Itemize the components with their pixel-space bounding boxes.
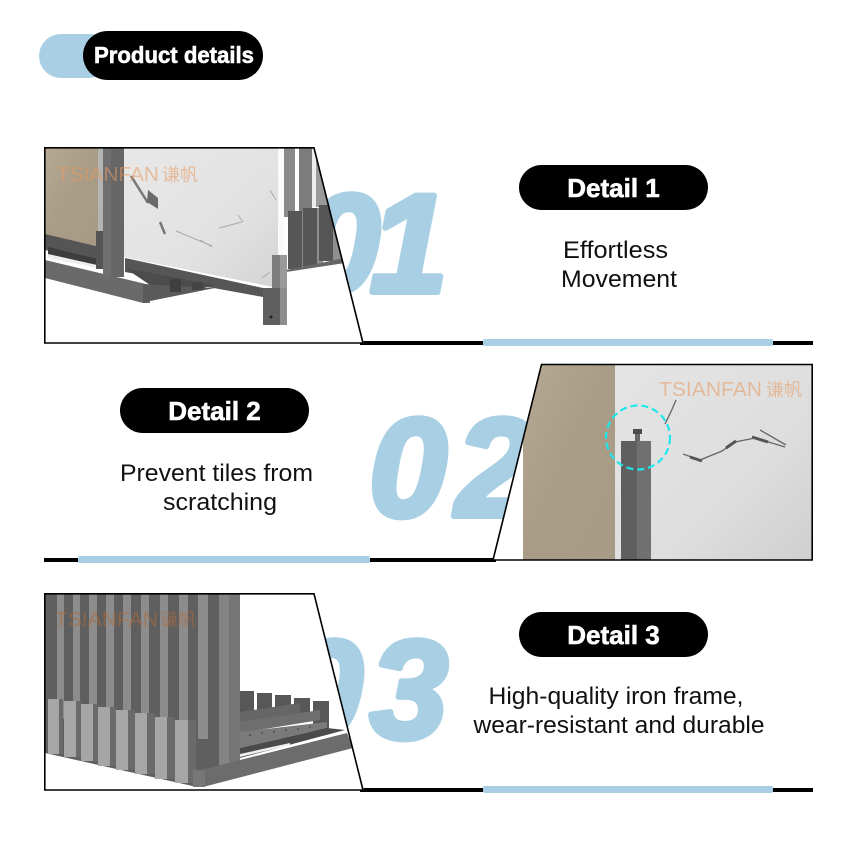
label pill: Detail 1: Detail 1 [567,173,660,203]
number 03: 03 [285,611,448,768]
label pill: Detail 2 [120,388,309,433]
baseline rule with blue accent, row 2 [44,556,496,563]
highlight circle [606,406,670,470]
product photo 3: iron frame rack [44,593,364,790]
label pill: Detail 1 [519,165,708,210]
description: Effortless Movement: Effortless [563,237,668,264]
watermark: TSIANFAN [57,164,159,186]
label pill: Detail 3 [519,612,708,657]
description: Prevent tiles from scratching: Prevent tiles from [120,460,313,487]
description: Effortless Movement [561,237,677,293]
description: High-quality iron frame, wear-resistant and durable: High-quality iron frame, [488,683,744,710]
product photo 2: upright post against marble slab [493,364,813,561]
watermark: 谦帆 [766,380,802,400]
description: Prevent tiles from scratching: scratching [163,489,277,516]
description: High-quality iron frame, wear-resistant and durable [472,683,764,739]
description: Prevent tiles from scratching [120,460,313,516]
watermark: 谦帆 [160,610,196,630]
label pill: Detail 2: Detail 2 [168,396,261,426]
baseline rule with blue accent, row 3 [360,786,813,793]
watermark: TSIANFAN [55,609,158,631]
watermark [659,379,802,401]
label pill: Detail 3: Detail 3 [567,620,660,650]
watermark [57,164,198,186]
watermark [55,609,196,631]
product photo 1: rack corner with marble slab [44,147,364,343]
baseline rule with blue accent, row 1 [360,339,813,346]
description: Effortless Movement: Movement [561,266,677,293]
watermark: 谦帆 [162,165,198,185]
watermark: TSIANFAN [659,379,762,401]
description: High-quality iron frame, wear-resistant and durable: wear-resistant and durable [472,712,764,739]
section heading: Product details [39,31,263,80]
post cap [633,429,642,441]
number 01: 01 [302,165,448,322]
section heading: Product details: Product details [94,42,254,68]
number 02: 02 [369,389,534,546]
